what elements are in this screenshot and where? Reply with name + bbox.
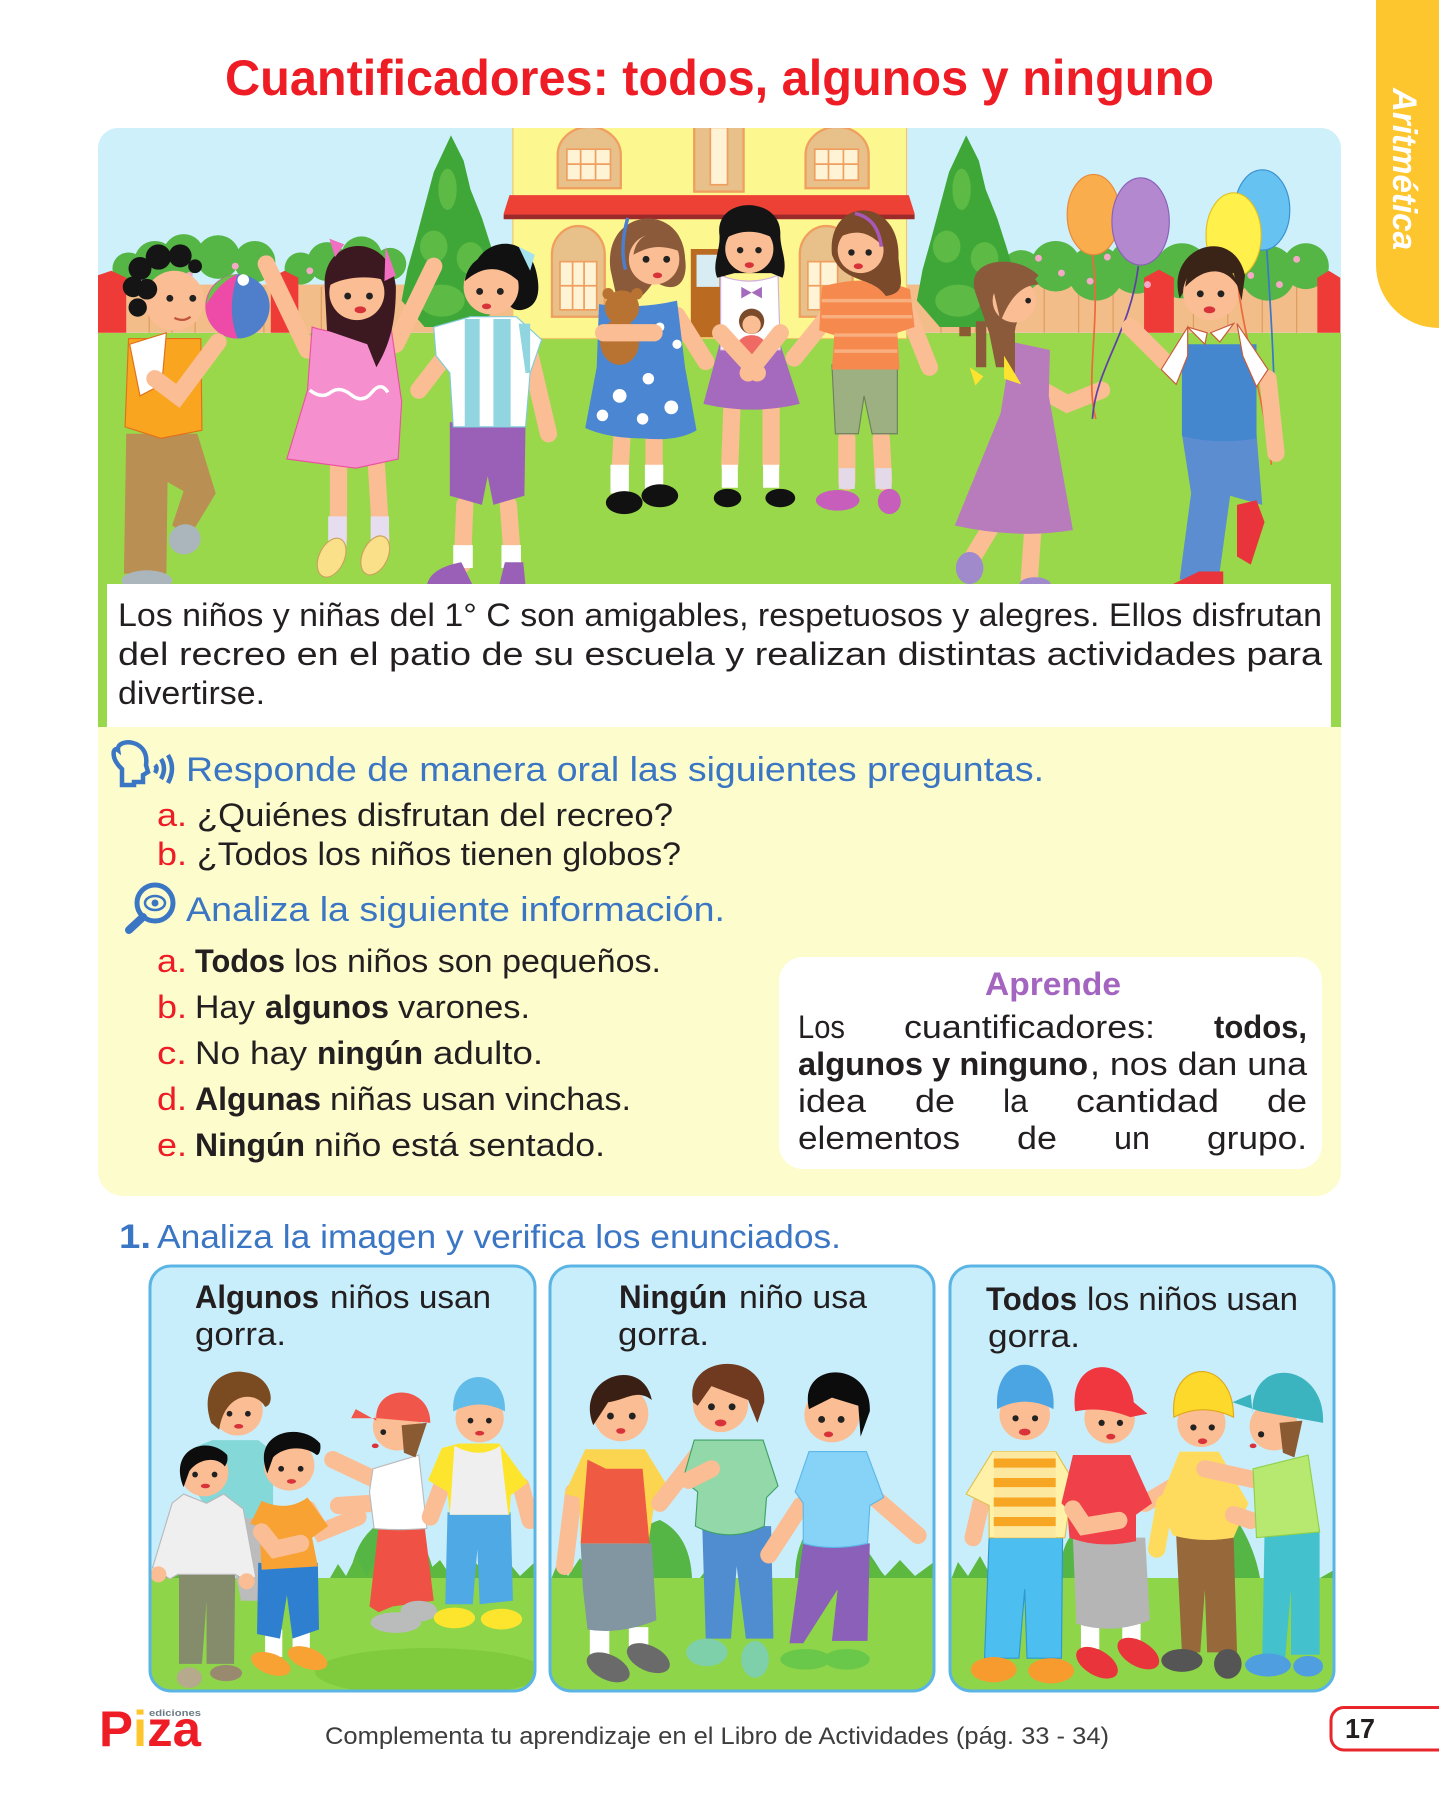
- balloons: [1067, 170, 1290, 465]
- child: boy in striped shirt: [966, 1365, 1074, 1683]
- list: statements: [157, 943, 661, 1163]
- card text: niño usa: [739, 1279, 867, 1315]
- callout: Aprende: [779, 957, 1322, 1169]
- card text: gorra.: [988, 1318, 1080, 1354]
- text block: story: Los niños y niñas del 1° C son amigables, respetuosos y alegres. Ellos disfrutan: [118, 597, 1322, 633]
- child: boy in red shirt: [1062, 1367, 1169, 1679]
- footer note: Complementa tu aprendizaje en el Libro de Actividades (pág. 33 - 34): [325, 1723, 1109, 1750]
- list: statements: Todos: [195, 943, 285, 979]
- page number: [1331, 1708, 1439, 1750]
- text block: story: divertirse.: [118, 675, 265, 711]
- callout: Aprende: de: [915, 1083, 955, 1119]
- callout: Aprende: un: [1114, 1120, 1150, 1156]
- child: boy with blue cap: [428, 1377, 530, 1629]
- text block: story: del recreo en el patio de su escuela y realizan distintas actividades para: [118, 636, 1322, 672]
- list: statements: algunos: [265, 989, 389, 1025]
- child: boy in blue shirt: [769, 1372, 918, 1670]
- list: oral questions: a.: [157, 797, 187, 833]
- logo: Piza ediciones: Piza: [99, 1701, 202, 1757]
- hedges and fence: [98, 234, 1340, 333]
- card text: Algunos: [195, 1279, 319, 1315]
- heading: analyze information: Analiza la siguiente información.: [186, 891, 725, 929]
- callout: Aprende: la: [1003, 1083, 1028, 1119]
- list: statements: Hay: [195, 989, 255, 1025]
- child: boy in yellow shirt: [1157, 1372, 1248, 1679]
- callout: Aprende: cantidad: [1076, 1083, 1219, 1119]
- card text: [986, 1281, 1298, 1354]
- card text: [195, 1279, 491, 1352]
- icon: magnifying glass: [129, 885, 173, 930]
- card text: gorra.: [195, 1316, 286, 1352]
- list: statements: c.: [157, 1035, 187, 1071]
- child: boy with red cap: [333, 1392, 437, 1633]
- heading: exercise 1: 1.: [119, 1218, 151, 1256]
- list: oral questions: [157, 797, 681, 872]
- card text: gorra.: [618, 1316, 709, 1352]
- child: boy in white sweater: [150, 1445, 256, 1688]
- text block: story: [107, 584, 1331, 727]
- heading: exercise 1: Analiza la imagen y verifica los enunciados.: [157, 1218, 841, 1255]
- callout: Aprende: elementos: [798, 1120, 960, 1156]
- list: statements: b.: [157, 989, 187, 1025]
- card text: [618, 1279, 867, 1352]
- panel: playground illustration: [98, 126, 1341, 727]
- list: oral questions: ¿Quiénes disfrutan del recreo?: [197, 797, 673, 833]
- list: statements: los niños son pequeños.: [294, 943, 661, 979]
- list: statements: Ningún: [195, 1127, 305, 1163]
- callout: Aprende: grupo.: [1207, 1120, 1307, 1156]
- panel: questions and information: [98, 727, 1341, 1196]
- callout: Aprende: Los: [798, 1009, 845, 1045]
- card text: niños usan: [330, 1279, 491, 1315]
- child: girl in purple dress: [955, 262, 1102, 593]
- child: boy in orange shirt: [248, 1432, 358, 1681]
- title: Cuantificadores: todos, algunos y ninguno: [225, 50, 1214, 106]
- list: statements: niñas usan vinchas.: [330, 1081, 631, 1117]
- child: boy with teal cap: [1205, 1373, 1323, 1676]
- child: girl in pink dress: [266, 239, 434, 582]
- callout: Aprende: cuantificadores:: [904, 1009, 1155, 1045]
- list: statements: varones.: [398, 989, 530, 1025]
- list: statements: niño está sentado.: [314, 1127, 605, 1163]
- child: girl with doll: [703, 205, 800, 507]
- card text: Todos: [986, 1281, 1077, 1317]
- callout: Aprende: , nos dan una: [1090, 1046, 1307, 1082]
- logo: Piza ediciones: ediciones: [149, 1708, 201, 1718]
- list: statements: d.: [157, 1081, 187, 1117]
- child: boy with ball: [122, 244, 270, 591]
- list: statements: e.: [157, 1127, 187, 1163]
- panel: card Todos: [950, 1266, 1334, 1691]
- callout: Aprende: todos,: [1214, 1009, 1307, 1045]
- child: boy in teal sweater: [192, 1372, 274, 1601]
- panel: card Ningún: [550, 1266, 934, 1691]
- child: girl with teddy bear: [585, 218, 706, 514]
- callout: Aprende: algunos y ninguno: [798, 1046, 1088, 1082]
- trees: [402, 135, 1017, 336]
- list: oral questions: ¿Todos los niños tienen globos?: [197, 836, 681, 872]
- school building: [504, 126, 915, 339]
- card text: los niños usan: [1087, 1281, 1298, 1317]
- child: girl in orange shirt: [794, 210, 929, 514]
- child: boy in green shirt: [683, 1364, 778, 1678]
- child: boy with balloons: [1130, 246, 1276, 585]
- heading: oral questions: Responde de manera oral las siguientes preguntas.: [186, 751, 1044, 789]
- callout: Aprende: idea: [798, 1083, 866, 1119]
- list: statements: adulto.: [433, 1035, 543, 1071]
- icon: speaking head: [114, 742, 172, 785]
- list: oral questions: b.: [157, 836, 187, 872]
- side tab: Aritmética: [1376, 0, 1439, 328]
- list: statements: a.: [157, 943, 187, 979]
- callout: Aprende: de: [1267, 1083, 1307, 1119]
- list: statements: No hay: [195, 1035, 307, 1071]
- card text: Ningún: [619, 1279, 727, 1315]
- list: statements: Algunas: [195, 1081, 321, 1117]
- callout: Aprende: de: [1017, 1120, 1057, 1156]
- side tab: Aritmética: Aritmética: [1385, 87, 1423, 250]
- panel: card Algunos: [150, 1266, 545, 1696]
- list: statements: ningún: [317, 1035, 423, 1071]
- child: girl in striped blouse: [419, 244, 549, 585]
- callout: Aprende: Aprende: [985, 966, 1121, 1002]
- child: boy in red and yellow shirt: [565, 1375, 700, 1688]
- page number: 17: [1345, 1713, 1375, 1744]
